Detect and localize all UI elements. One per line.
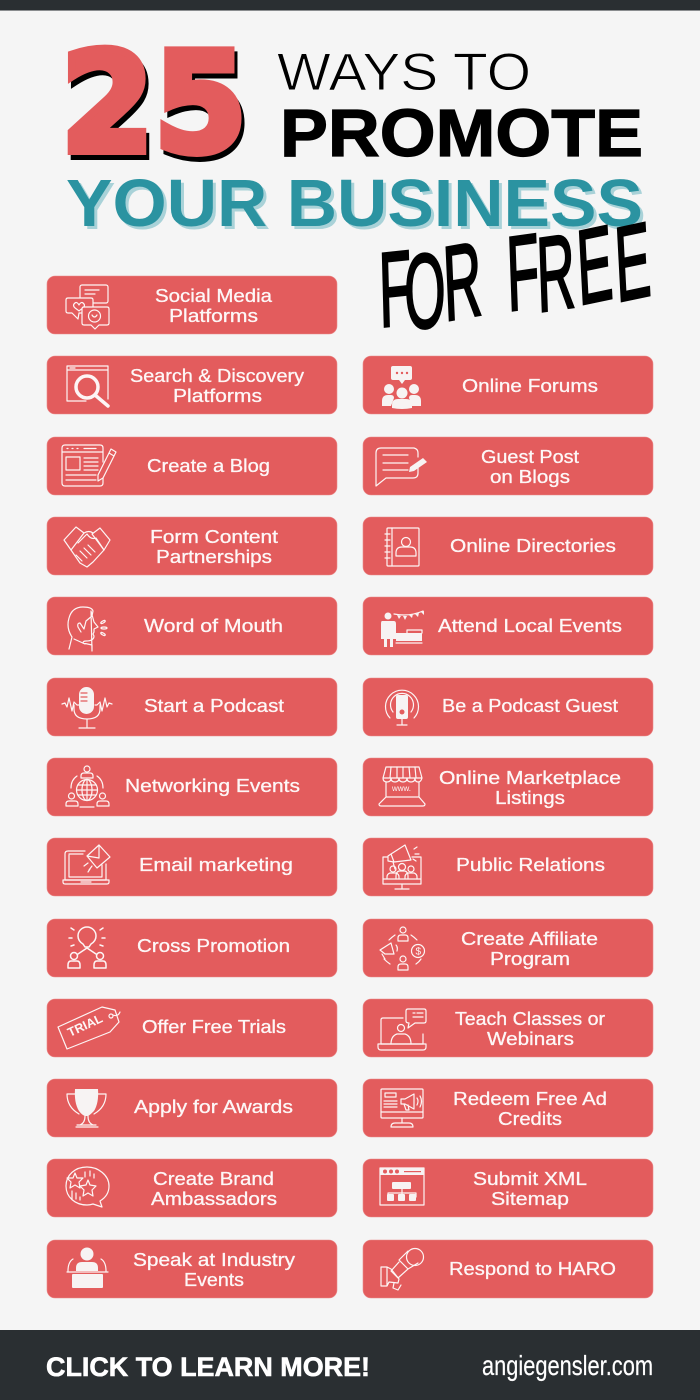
label xyxy=(461,928,598,969)
label: Listings xyxy=(495,787,565,808)
top bar xyxy=(0,0,700,11)
label: Partnerships xyxy=(156,546,272,567)
button: teach classes or webinars xyxy=(363,999,653,1057)
label xyxy=(130,365,305,406)
icon: sitemap window xyxy=(380,1168,424,1205)
label: Online Directories xyxy=(450,535,616,556)
button: apply for awards xyxy=(47,1079,337,1137)
icon: bulb and people xyxy=(68,927,106,968)
button: create a blog xyxy=(47,437,337,495)
button: speak at industry events xyxy=(47,1240,337,1298)
icon: speaking head xyxy=(68,607,107,651)
label: Online Forums xyxy=(462,375,598,396)
label: Search & Discovery xyxy=(130,365,305,386)
heading: promote: PROMOTE xyxy=(280,96,643,171)
label xyxy=(453,1088,607,1129)
label: Attend Local Events xyxy=(438,615,622,636)
button: public relations xyxy=(363,838,653,896)
icon: speaker at podium xyxy=(67,1248,108,1288)
label: Public Relations xyxy=(456,854,605,875)
label xyxy=(455,1008,605,1049)
website: angiegensler.com xyxy=(482,1350,653,1381)
label: Networking Events xyxy=(125,775,300,796)
label: Ambassadors xyxy=(151,1188,277,1209)
label xyxy=(473,1168,587,1209)
label: Platforms xyxy=(169,305,258,326)
button: guest post on blogs xyxy=(363,437,653,495)
label: Start a Podcast xyxy=(144,695,284,716)
footer bar xyxy=(0,1330,700,1400)
icon: globe and people xyxy=(66,766,109,807)
label: Online Marketplace xyxy=(439,767,621,788)
icon: address book xyxy=(385,528,419,566)
icon: chat bubbles xyxy=(66,285,109,329)
label: Speak at Industry xyxy=(133,1249,296,1270)
icon: laptop storefront: www. xyxy=(391,784,411,793)
button: respond to haro xyxy=(363,1240,653,1298)
button: offer free trials xyxy=(47,999,337,1057)
icon: person at event stand xyxy=(381,611,424,647)
button: attend local events xyxy=(363,597,653,655)
label: Program xyxy=(490,948,570,969)
title xyxy=(61,0,653,352)
heading: your business: YOUR BUSINESS xyxy=(66,166,643,241)
label: Offer Free Trials xyxy=(142,1016,286,1037)
icon: trial tag: TRIAL xyxy=(65,1011,105,1040)
label xyxy=(133,1249,296,1290)
button: be a podcast guest xyxy=(363,678,653,736)
button: redeem free ad credits xyxy=(363,1079,653,1137)
label: Cross Promotion xyxy=(137,935,290,956)
icon: microphone in circle xyxy=(386,690,418,725)
icon: speech bubble with pencil xyxy=(376,448,427,486)
button: content partnerships xyxy=(47,517,337,575)
icon: laptop with envelope xyxy=(63,845,110,884)
label: Apply for Awards xyxy=(134,1096,293,1117)
label xyxy=(155,285,273,326)
icon: group with chat bubble xyxy=(382,366,421,409)
label xyxy=(151,1168,277,1209)
heading: your business: YOUR BUSINESS xyxy=(69,169,646,244)
icon: megaphone and audience on monitor xyxy=(383,845,421,889)
icon: laptop storefront xyxy=(379,767,425,806)
button: online forums xyxy=(363,356,653,414)
label: Platforms xyxy=(173,385,262,406)
label: Create Affiliate xyxy=(461,928,598,949)
icon: magnifier in browser xyxy=(67,366,108,406)
label: Webinars xyxy=(487,1028,574,1049)
label: on Blogs xyxy=(490,466,570,487)
label: Word of Mouth xyxy=(144,615,283,636)
label: Submit XML xyxy=(473,1168,587,1189)
label: Form Content xyxy=(150,526,278,547)
button: email marketing xyxy=(47,838,337,896)
label xyxy=(439,767,621,808)
icon: hand holding microphone xyxy=(381,1248,424,1290)
label: Social Media xyxy=(155,285,273,306)
label xyxy=(481,446,579,487)
label: Credits xyxy=(498,1108,562,1129)
label: Redeem Free Ad xyxy=(453,1088,607,1109)
icon: laptop with presenter xyxy=(378,1009,426,1050)
label: Create a Blog xyxy=(147,455,270,476)
label: Email marketing xyxy=(139,854,293,875)
heading: ways to: WAYS TO xyxy=(277,43,531,102)
button: start a podcast xyxy=(47,678,337,736)
label xyxy=(150,526,278,567)
icon: trophy xyxy=(67,1089,106,1127)
icon: affiliate cycle xyxy=(380,927,424,970)
button: search and discovery xyxy=(47,356,337,414)
button: word of mouth xyxy=(47,597,337,655)
label: Guest Post xyxy=(481,446,579,467)
icon: microphone with waves xyxy=(62,687,112,728)
button: create affiliate program xyxy=(363,919,653,977)
number 25: 25 xyxy=(61,23,247,184)
button: create brand ambassadors xyxy=(47,1159,337,1217)
number 25: 25 xyxy=(64,28,250,189)
button: submit xml sitemap xyxy=(363,1159,653,1217)
icon: blog page with pencil xyxy=(62,445,116,486)
button: online marketplace listings xyxy=(363,758,653,816)
label: Respond to HARO xyxy=(449,1258,616,1279)
label: Create Brand xyxy=(153,1168,274,1189)
icon: trial tag xyxy=(58,1007,120,1049)
label: Teach Classes or xyxy=(455,1008,605,1029)
button: cross promotion xyxy=(47,919,337,977)
call to action: CLICK TO LEARN MORE! xyxy=(46,1352,370,1382)
button: networking events xyxy=(47,758,337,816)
icon: handshake xyxy=(64,527,110,567)
button: social media platforms xyxy=(47,276,337,334)
button: online directories xyxy=(363,517,653,575)
label: Be a Podcast Guest xyxy=(442,695,618,716)
icon: affiliate cycle: $ xyxy=(416,946,422,958)
icon: stars in speech bubble xyxy=(66,1167,109,1207)
icon: monitor with megaphone xyxy=(381,1089,423,1127)
label: Events xyxy=(184,1269,244,1290)
label: Sitemap xyxy=(491,1188,569,1209)
